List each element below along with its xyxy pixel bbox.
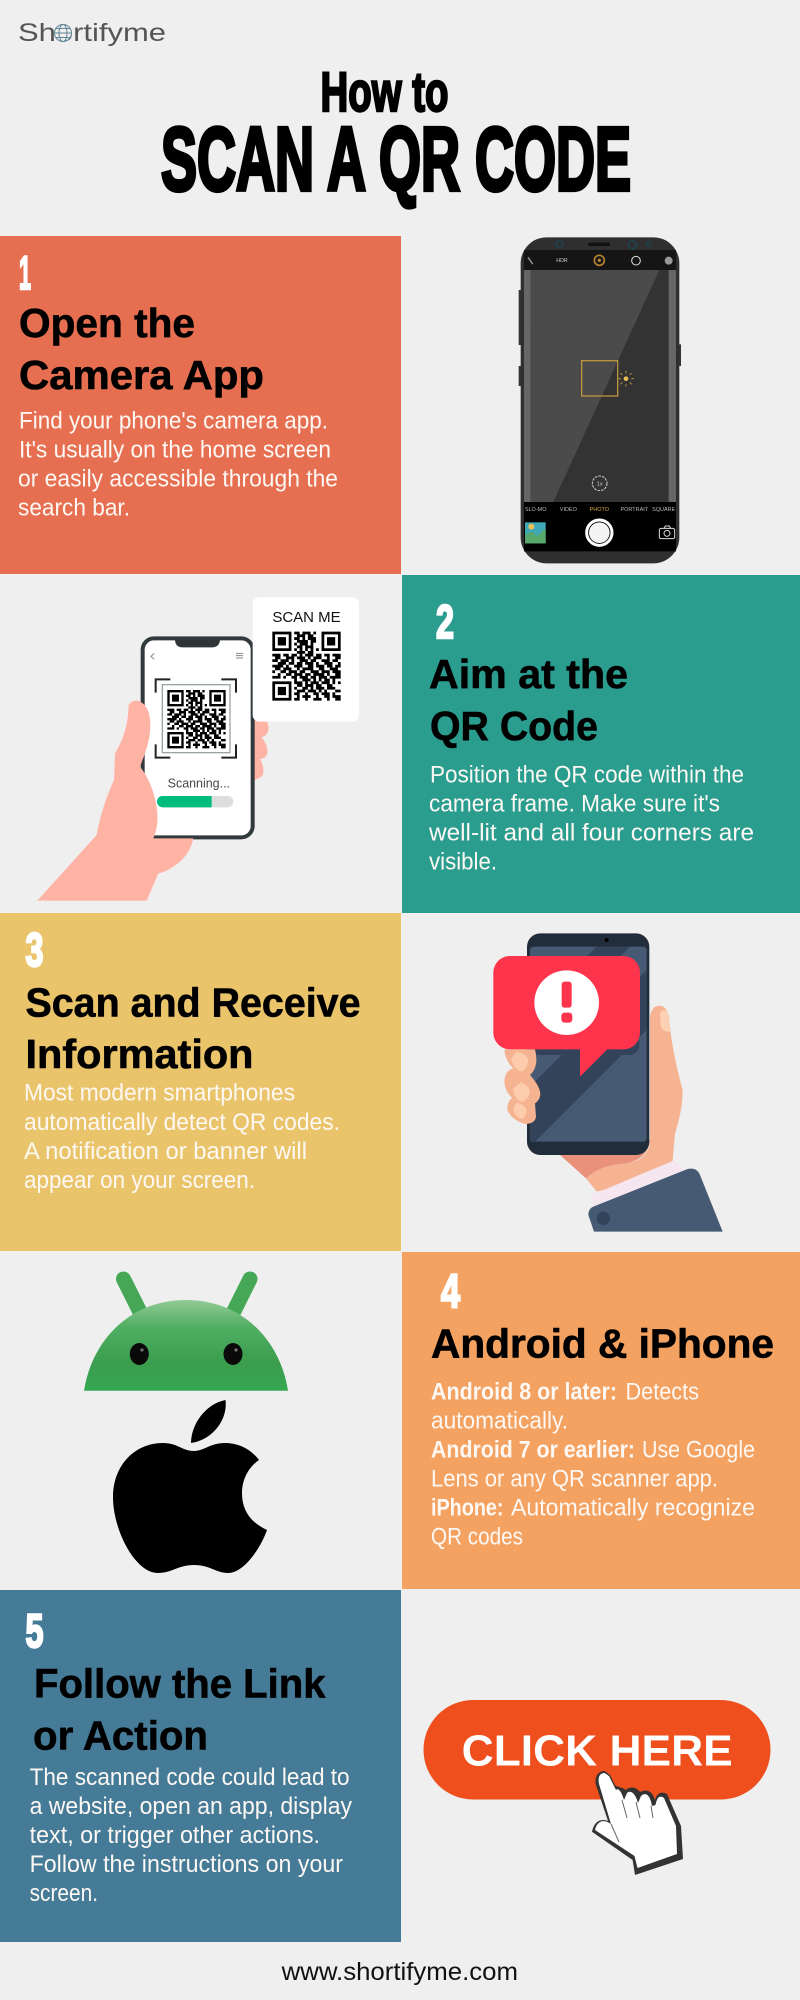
illustration: hand scanning QR code bbox=[37, 597, 359, 901]
body text step 2: visible. bbox=[429, 849, 497, 876]
panel: step 2: 2 bbox=[436, 595, 454, 648]
body text step 5 bbox=[30, 1764, 352, 1907]
shutter button bbox=[587, 520, 612, 545]
heading: Aim at the QR Code: Aim at the bbox=[429, 651, 628, 697]
body text step 2: Position the QR code within the bbox=[430, 762, 744, 789]
QR card: scan me: SCAN ME bbox=[272, 609, 341, 626]
scanning label: Scanning... bbox=[168, 776, 230, 790]
body text step 1: Find your phone's camera app. bbox=[19, 407, 328, 434]
body text step 1 bbox=[18, 407, 338, 522]
panel: step 3: 3 bbox=[26, 923, 44, 976]
title bbox=[161, 60, 631, 210]
fingers bbox=[504, 1049, 540, 1124]
heading: Aim at the QR Code bbox=[429, 651, 628, 749]
flip camera icon bbox=[659, 526, 675, 539]
phone bbox=[143, 638, 253, 837]
panel: step 5: 5 bbox=[26, 1604, 44, 1657]
body text step 3: appear on your screen. bbox=[24, 1167, 255, 1194]
body text step 3 bbox=[24, 1080, 340, 1194]
body text step 3: Most modern smartphones bbox=[24, 1080, 295, 1107]
body text step 5: a website, open an app, display bbox=[30, 1793, 352, 1820]
alert bubble bbox=[493, 956, 640, 1077]
camera lenses bbox=[556, 241, 651, 249]
fingers behind phone bbox=[250, 693, 271, 781]
top camera icons: HDR bbox=[556, 258, 568, 264]
body text step 2: well-lit and all four corners are bbox=[428, 820, 754, 847]
icon: globe in logo bbox=[54, 24, 72, 42]
body text step 4: Android 7 or earlier: bbox=[431, 1437, 635, 1464]
icon: Android robot bbox=[84, 1279, 288, 1391]
body text step 2 bbox=[428, 762, 754, 876]
heading: Scan and Receive Information: Information bbox=[26, 1031, 254, 1077]
panel: step 4 bbox=[402, 1252, 800, 1589]
body text step 4: Detects bbox=[626, 1379, 699, 1406]
heading: Aim at the QR Code: QR Code bbox=[430, 703, 598, 749]
zoom button 1x: 1x bbox=[597, 482, 603, 488]
body text step 5: screen. bbox=[30, 1880, 98, 1907]
body text step 1: It's usually on the home screen bbox=[19, 436, 331, 463]
camera mode labels: PORTRAIT bbox=[621, 507, 649, 513]
title: How to bbox=[320, 60, 448, 123]
QR code on phone bbox=[167, 690, 226, 748]
body text step 4: iPhone: bbox=[431, 1495, 504, 1522]
zoom button 1x bbox=[592, 476, 607, 491]
panel: step 1 bbox=[0, 236, 401, 574]
illustration: phone with alert bbox=[493, 933, 723, 1232]
scan frame bbox=[156, 679, 236, 758]
focus square bbox=[582, 361, 634, 396]
body text step 3: automatically detect QR codes. bbox=[24, 1109, 340, 1136]
body text step 5: text, or trigger other actions. bbox=[30, 1822, 320, 1849]
heading: Scan and Receive Information bbox=[26, 979, 360, 1077]
gallery thumbnail bbox=[525, 522, 546, 543]
body text step 4: Use Google bbox=[642, 1437, 755, 1464]
button: click here: CLICK HERE bbox=[462, 1726, 733, 1776]
phone body bbox=[527, 933, 649, 1155]
heading: Follow the Link or Action bbox=[33, 1660, 326, 1758]
body text step 4: Lens or any QR scanner app. bbox=[431, 1466, 718, 1493]
body text step 4: Android 8 or later: bbox=[431, 1379, 617, 1406]
camera mode labels bbox=[525, 507, 676, 513]
body text step 2: camera frame. Make sure it's bbox=[429, 791, 720, 818]
body text step 4 bbox=[431, 1379, 755, 1551]
body text step 1: or easily accessible through the bbox=[18, 466, 338, 492]
progress bar bbox=[157, 796, 233, 807]
panel: step 5 bbox=[0, 1590, 401, 1942]
logo: Shortifyme: Shortifyme bbox=[18, 19, 166, 47]
hand back and thumb bbox=[586, 1006, 683, 1192]
body text step 4: automatically. bbox=[431, 1408, 568, 1435]
body text step 5: Follow the instructions on your bbox=[30, 1851, 343, 1878]
camera mode labels: PHOTO bbox=[590, 507, 609, 513]
heading: Scan and Receive Information: Scan and Receive bbox=[26, 979, 360, 1025]
panel: step 1: 1 bbox=[19, 246, 31, 299]
camera mode labels: VIDEO bbox=[560, 507, 577, 513]
heading: Follow the Link or Action: Follow the Link bbox=[34, 1660, 326, 1706]
icon: pointing hand cursor bbox=[592, 1771, 683, 1875]
camera mode labels: SQUARE bbox=[652, 507, 676, 513]
hand bbox=[37, 701, 193, 901]
heading: Open the Camera App: Camera App bbox=[19, 352, 264, 398]
panel: step 2 bbox=[402, 575, 800, 913]
shirt cuff bbox=[592, 1160, 684, 1207]
body text step 3: A notification or banner will bbox=[24, 1138, 307, 1165]
icon: Apple logo bbox=[113, 1400, 267, 1573]
illustration: phone camera app bbox=[519, 237, 681, 563]
panel: step 3 bbox=[0, 913, 401, 1251]
jacket sleeve bbox=[588, 1169, 723, 1232]
wrist shadow bbox=[560, 1140, 650, 1178]
QR card: scan me bbox=[253, 597, 359, 722]
heading: Open the Camera App: Open the bbox=[19, 300, 195, 346]
body text step 5: The scanned code could lead to bbox=[30, 1764, 350, 1791]
button: click here bbox=[424, 1700, 770, 1800]
camera mode labels: SLO-MO bbox=[525, 507, 546, 513]
body text step 4: Automatically recognize bbox=[511, 1495, 755, 1522]
top camera icons bbox=[528, 255, 673, 265]
footer: website url: www.shortifyme.com bbox=[281, 1958, 518, 1986]
panel: step 4: 4 bbox=[441, 1264, 460, 1317]
body text step 1: search bar. bbox=[18, 494, 130, 522]
heading: Open the Camera App bbox=[19, 300, 264, 398]
heading: Follow the Link or Action: or Action bbox=[33, 1712, 208, 1758]
body text step 4: QR codes bbox=[431, 1524, 523, 1551]
heading: Android & iPhone: Android & iPhone bbox=[431, 1320, 774, 1366]
